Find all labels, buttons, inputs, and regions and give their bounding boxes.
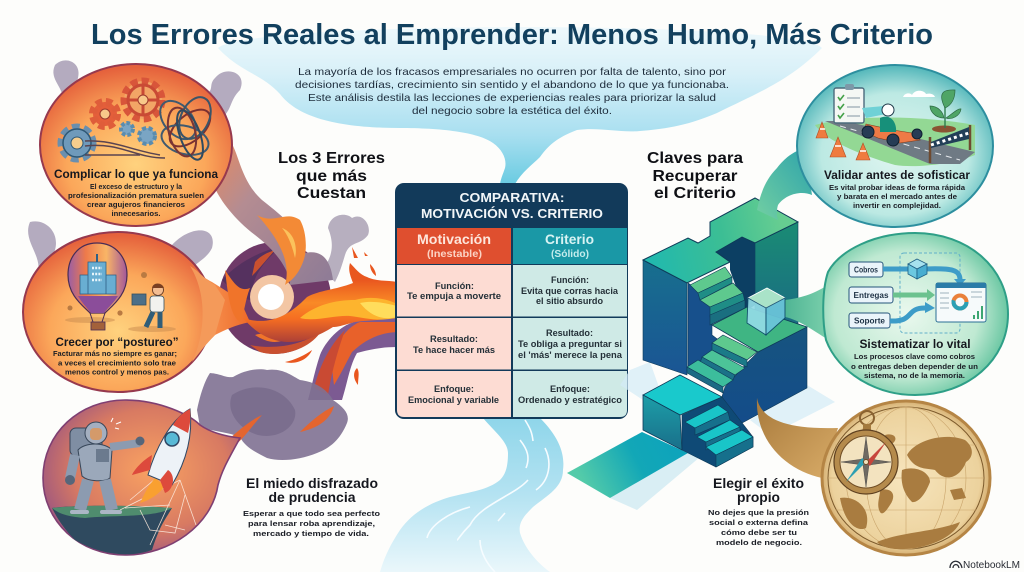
flame: second bubble tail xyxy=(185,262,250,366)
intro text xyxy=(295,66,729,117)
row: resultado: el 'más' merece la pena xyxy=(518,349,623,360)
column: motivación xyxy=(397,228,511,264)
heading: Sistematizar lo vital xyxy=(860,337,970,351)
icon: astronaut xyxy=(65,418,144,512)
intro text: decisiones tardías, crecimiento sin sentido y el abandono de lo que ya funcionaba. xyxy=(295,79,729,91)
icon: spider web xyxy=(120,475,196,545)
column: criterio xyxy=(513,228,627,264)
body text: sistema, no de la memoria. xyxy=(864,371,965,380)
icon: gears and tangle xyxy=(62,81,217,163)
row: resultado: Resultado: xyxy=(546,327,593,338)
text: miedo disfrazado: de prudencia xyxy=(268,490,356,505)
table header: COMPARATIVA: xyxy=(460,190,564,205)
panel: miedo xyxy=(43,400,240,555)
body text xyxy=(851,352,978,380)
smoke: cloud above flame xyxy=(322,215,369,282)
row: resultado: Te obliga a preguntar si xyxy=(518,338,622,349)
panel: postureo xyxy=(23,232,225,392)
icon: cube xyxy=(908,259,927,279)
tail: to glass cube xyxy=(785,285,832,342)
text: elegir el éxito xyxy=(708,476,809,547)
icon: entregas label xyxy=(849,287,893,303)
text: elegir el éxito: social o externa defina xyxy=(709,518,809,527)
row: función: Evita que corras hacia xyxy=(521,285,619,296)
steps: lower flight xyxy=(685,405,753,467)
panel: sistematizar xyxy=(785,233,1008,395)
block: dark shaft xyxy=(716,237,755,312)
row: resultado: Te hace hacer más xyxy=(413,344,495,355)
smoke: lower cloud xyxy=(197,369,348,460)
panel: comparison table xyxy=(395,183,628,419)
heading: Complicar lo que ya funciona xyxy=(54,167,218,181)
flame: sparks xyxy=(285,247,376,385)
intro text: La mayoría de los fracasos empresariales no ocurren por falta de talento, sino por xyxy=(298,66,727,78)
column: criterio: Criterio xyxy=(545,232,594,247)
row: enfoque xyxy=(397,371,627,417)
text: miedo disfrazado: Esperar a que todo sea perfecto xyxy=(243,509,380,518)
row: función: Función: xyxy=(551,274,589,285)
panel: complicar xyxy=(40,64,232,226)
icon: track scene xyxy=(815,84,975,166)
steps: middle flight xyxy=(687,335,757,393)
panel: validar xyxy=(757,65,993,227)
section heading: claves: el Criterio xyxy=(654,185,736,202)
section heading: errores: Cuestan xyxy=(297,185,366,202)
text: elegir el éxito: Elegir el éxito xyxy=(713,476,804,491)
logo: NotebookLM: NotebookLM xyxy=(963,559,1020,571)
flame: dark swirl disc xyxy=(219,242,331,354)
section heading: errores: Los 3 Errores xyxy=(278,150,385,167)
body text: crear agujeros financieros xyxy=(87,200,185,209)
body text: profesionalización prematura suelen xyxy=(68,191,204,200)
row: enfoque: Ordenado y estratégico xyxy=(518,394,622,405)
icon: clipboard xyxy=(834,88,864,123)
body text: a veces el crecimiento solo trae xyxy=(58,358,176,368)
block: top surface xyxy=(643,198,798,283)
text: elegir el éxito: propio xyxy=(737,490,780,505)
column: motivación: Motivación xyxy=(417,232,491,247)
text: miedo disfrazado xyxy=(243,476,380,538)
steps: upper flight xyxy=(690,267,745,325)
icon: soporte label xyxy=(849,313,890,328)
table header xyxy=(421,190,603,221)
arrows: process flows xyxy=(883,269,966,321)
panel: compass and map xyxy=(757,398,990,555)
intro text: del negocio sobre la estética del éxito. xyxy=(412,105,612,117)
flame: wisps inside smoke xyxy=(206,406,334,458)
heading: Validar antes de sofisticar xyxy=(824,168,970,182)
smoke: upper plumes xyxy=(28,60,242,292)
row: enfoque: Enfoque: xyxy=(434,383,474,394)
text: elegir el éxito: modelo de negocio. xyxy=(716,538,802,547)
icon: soporte label: Soporte xyxy=(854,316,886,326)
icon: cobros label: Cobros xyxy=(854,266,878,274)
text: miedo disfrazado: mercado y tiempo de vida. xyxy=(253,529,369,538)
platform: green landing xyxy=(712,307,807,352)
icon: checkered flag xyxy=(930,125,970,163)
icon: rocket xyxy=(132,409,191,503)
icon: glass cube on landing xyxy=(747,288,785,335)
section heading: claves xyxy=(647,150,743,202)
icon: plant xyxy=(932,126,956,132)
icon: balloon and man xyxy=(65,243,176,332)
steps: lower dark base xyxy=(682,397,753,467)
row: función: Te empuja a moverte xyxy=(407,290,501,301)
body text xyxy=(68,182,204,218)
section heading: claves: Recuperar xyxy=(652,168,738,185)
body text: Facturar más no siempre es ganar; xyxy=(53,349,177,358)
body text: invertir en complejidad. xyxy=(853,201,941,210)
tail: to stairs xyxy=(757,148,812,220)
staircase illustration xyxy=(567,198,835,510)
section heading: errores xyxy=(278,150,385,202)
shadows on ground xyxy=(620,362,835,435)
row: enfoque: Enfoque: xyxy=(550,383,590,394)
text: miedo disfrazado: El miedo disfrazado xyxy=(246,476,378,491)
icon: dashed system frame xyxy=(900,253,960,333)
block: lower wall xyxy=(720,327,807,423)
icon: cliff xyxy=(52,506,172,554)
heading: Crecer por “postureo” xyxy=(56,335,178,349)
icon: cones xyxy=(816,122,870,160)
body text: innecesarios. xyxy=(112,209,160,218)
block: upper right wall xyxy=(755,222,798,352)
column: criterio: (Sólido) xyxy=(551,249,589,260)
flame: main stream into table xyxy=(243,263,397,342)
flame: lower branch with purple smoke xyxy=(308,318,397,400)
body text: menos control y menos pas. xyxy=(65,368,169,376)
map: continents xyxy=(840,434,972,549)
text: miedo disfrazado: para lensar roba aprendizaje, xyxy=(248,519,375,528)
body text: Es vital probar ideas de forma rápida xyxy=(829,183,966,192)
body text: o entregas deben depender de un xyxy=(851,362,978,371)
row: función: el sitio absurdo xyxy=(536,295,603,306)
column: motivación: (Inestable) xyxy=(427,249,482,260)
section heading: claves: Claves para xyxy=(647,150,743,167)
icon: entregas label: Entregas xyxy=(854,291,889,300)
row: función: Función: xyxy=(435,280,474,291)
icon: compass xyxy=(834,411,898,494)
icon: go kart xyxy=(864,124,920,143)
row: resultado: Resultado: xyxy=(430,333,478,344)
flame: tail of first bubble xyxy=(215,135,333,285)
row: resultado xyxy=(397,318,627,370)
body text xyxy=(829,183,966,210)
row: enfoque: Emocional y variable xyxy=(408,394,499,405)
text: elegir el éxito: cómo debe ser tu xyxy=(721,528,797,537)
title: Los Errores Reales al Emprender: Menos Humo, Más Criterio xyxy=(91,19,933,51)
fire and smoke network xyxy=(28,60,397,460)
platform: teal block xyxy=(643,375,722,450)
block: left tower faces xyxy=(643,222,725,375)
body text: y barata en el mercado antes de xyxy=(837,192,957,201)
water: intro stream and river xyxy=(218,27,822,572)
body text: El exceso de estructuro y la xyxy=(90,182,183,191)
body text: Los procesos clave como cobros xyxy=(854,352,975,361)
table header: MOTIVACIÓN VS. CRITERIO xyxy=(421,206,603,221)
text: elegir el éxito: No dejes que la presión xyxy=(708,508,809,517)
icon: dashboard xyxy=(936,283,986,322)
section heading: errores: que más xyxy=(296,168,367,185)
path: teal road xyxy=(567,432,700,510)
icon: cobros label xyxy=(849,262,883,277)
body text xyxy=(53,349,177,376)
icon: clouds xyxy=(903,91,935,97)
row: función xyxy=(397,265,627,316)
intro text: Este análisis destila las lecciones de experiencias reales para priorizar la salud xyxy=(308,92,716,104)
